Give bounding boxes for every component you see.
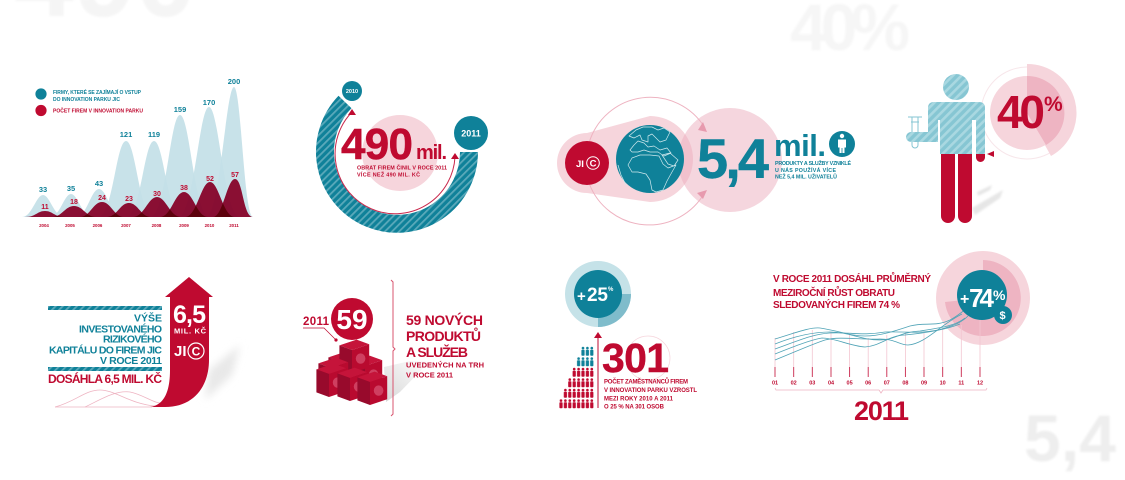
- heading: [406, 311, 483, 360]
- description: PRODUKTY A SLUŽBY VZNIKLÉ: [775, 159, 851, 167]
- heading: [773, 271, 931, 311]
- growth gauge: [565, 261, 631, 327]
- year labels: 2006: [93, 223, 103, 228]
- description: O 25 % NA 301 OSOB: [604, 404, 665, 410]
- interested firms values: [39, 77, 240, 194]
- month labels: 12: [977, 380, 983, 386]
- year labels: 2010: [205, 223, 215, 228]
- badge 2010: 2010: [346, 89, 358, 95]
- year label with pointer: 2011: [303, 316, 330, 328]
- heading: 59 NOVÝCH: [406, 311, 483, 328]
- arrow value: MIL. KČ: [174, 326, 207, 336]
- JIC logo: [174, 343, 204, 360]
- company count values: 23: [125, 196, 133, 203]
- badge 2010: [342, 81, 362, 101]
- interested firms values: 121: [120, 130, 132, 139]
- trend lines: [775, 300, 978, 360]
- month labels: 06: [865, 380, 871, 386]
- heading: INVESTOVANÉHO: [79, 322, 162, 335]
- year labels: [39, 223, 239, 228]
- badge 2011: [454, 116, 488, 150]
- description: V INNOVATION PARKU VZROSTL: [604, 388, 697, 394]
- value 490 mil.: 490: [341, 120, 413, 169]
- month gridlines: [775, 320, 980, 367]
- large pink circle: [678, 108, 782, 212]
- month labels: 10: [940, 380, 946, 386]
- heading: MEZIROČNÍ RŮST OBRATU: [773, 285, 895, 299]
- pink capsule: [557, 116, 693, 202]
- pink disc: [362, 115, 438, 191]
- interested firms values: 43: [95, 179, 103, 188]
- panel: 5,4 million users: [557, 97, 855, 225]
- description: U NÁS POUŽÍVÁ VÍCE: [775, 166, 836, 174]
- description: MEZI ROKY 2010 A 2011: [604, 396, 674, 402]
- company count values: [41, 172, 239, 211]
- description: OBRAT FIREM ČINIL V ROCE 2011: [357, 164, 447, 172]
- growth gauge: 25: [587, 285, 608, 306]
- description: [357, 164, 447, 178]
- month labels: 08: [902, 380, 908, 386]
- company count values: 24: [98, 195, 106, 202]
- company count values: 38: [180, 185, 188, 192]
- ghost number 5,4: 5,4: [1024, 401, 1116, 475]
- month labels: 07: [884, 380, 890, 386]
- month labels: 11: [958, 380, 964, 386]
- year labels: 2005: [65, 223, 75, 228]
- floor shadow: [972, 185, 1003, 215]
- description: VÍCE NEŽ 490 MIL. KČ: [357, 170, 420, 178]
- company count values: 30: [153, 191, 161, 198]
- legend: FIRMY, KTERÉ SE ZAJÍMAJÍ O VSTUP: [53, 88, 142, 96]
- year labels: 2011: [229, 223, 239, 228]
- panel: turnover 490 mil: [325, 81, 488, 224]
- growth badge: %: [993, 287, 1006, 303]
- value 40%: 40: [997, 86, 1045, 138]
- year bracket: [775, 388, 987, 393]
- year labels: 2007: [121, 223, 131, 228]
- panel: company count chart: [22, 77, 253, 228]
- month labels: 05: [847, 380, 853, 386]
- value 301: 301: [602, 335, 669, 381]
- people pyramid: [559, 346, 594, 410]
- growth badge: $: [999, 310, 1006, 322]
- heading: KAPITÁLU DO FIREM JIC: [49, 343, 162, 356]
- company count peaks: [25, 179, 253, 217]
- person lower red: [941, 154, 985, 223]
- hatched rule top: [48, 306, 162, 310]
- growth gauge: %: [608, 287, 614, 293]
- growth badge: 74: [969, 283, 995, 313]
- JIC logo circle: [565, 141, 609, 185]
- company count values: 18: [70, 199, 78, 206]
- globe: [616, 125, 684, 193]
- panel: venture capital arrow: [48, 277, 240, 407]
- heading: RIZIKOVÉHO: [103, 333, 162, 346]
- orbit arrows: [589, 97, 707, 225]
- value 490 mil.: [341, 120, 447, 169]
- value 5,4 mil.: mil.: [774, 128, 826, 163]
- legend: [35, 88, 143, 116]
- badge 59: [331, 298, 373, 340]
- interested firms values: 170: [203, 98, 215, 107]
- heading: [49, 312, 162, 367]
- heading: V ROCE 2011 DOSÁHL PRŮMĚRNÝ: [773, 271, 931, 285]
- arrow value: 6,5: [173, 301, 206, 329]
- hatched rule bottom: [48, 367, 162, 371]
- heading: VÝŠE: [134, 312, 162, 325]
- growth badge: [957, 270, 1012, 324]
- month ticks: [775, 367, 980, 377]
- month labels: [772, 380, 983, 386]
- interested firms peaks: [22, 87, 253, 217]
- year labels: 2004: [39, 223, 49, 228]
- up arrow: [594, 332, 602, 408]
- heading: A SLUŽEB: [406, 343, 468, 360]
- JIC logo: C: [192, 344, 201, 358]
- panel: 74 percent turnover growth: [772, 251, 1030, 426]
- value 5,4 mil.: 5,4: [697, 127, 769, 190]
- growth gauge: +: [577, 288, 586, 305]
- result line: DOSÁHLA 6,5 MIL. KČ: [48, 371, 162, 386]
- panel: 301 employees: [559, 261, 697, 410]
- value 40%: %: [1044, 93, 1063, 116]
- subtext: V ROCE 2011: [406, 370, 453, 380]
- growth badge: +: [960, 291, 969, 308]
- faint circle: [626, 336, 670, 380]
- heading: SLEDOVANÝCH FIREM 74 %: [773, 298, 900, 311]
- stacked boxes: [316, 340, 387, 405]
- month labels: 09: [921, 380, 927, 386]
- month labels: 02: [791, 380, 797, 386]
- interested firms values: 200: [228, 77, 240, 86]
- legend: DO INNOVATION PARKU JIC: [53, 97, 120, 103]
- value 5,4 mil.: [697, 127, 826, 190]
- radial chart: [936, 251, 1030, 345]
- month labels: 01: [772, 380, 778, 386]
- panel: 59 new products: [303, 280, 484, 416]
- year labels: 2009: [179, 223, 189, 228]
- description: POČET ZAMĚSTNANCŮ FIREM: [604, 378, 688, 386]
- year label with pointer: [303, 316, 338, 342]
- pie chart: [981, 64, 1077, 159]
- icon: person in circle: [829, 131, 855, 157]
- legend: POČET FIREM V INNOVATION PARKU: [53, 107, 143, 114]
- month labels: 03: [809, 380, 815, 386]
- JIC logo circle: JI: [576, 159, 584, 170]
- badge 59: 59: [336, 304, 368, 335]
- pointer: [987, 151, 994, 157]
- interested firms values: 35: [67, 184, 75, 193]
- wave lines: [55, 390, 165, 407]
- description: [775, 159, 851, 180]
- year labels: 2008: [152, 223, 162, 228]
- person upper hatched: [906, 74, 985, 154]
- hatched ring: [325, 102, 469, 224]
- badge 2011: 2011: [461, 128, 481, 138]
- value 490 mil.: mil.: [416, 142, 447, 164]
- company count values: 57: [231, 172, 239, 179]
- description: NEŽ 5,4 MIL. UŽIVATELŮ: [775, 172, 837, 180]
- panel: 40 percent person: [906, 64, 1077, 223]
- interested firms values: 33: [39, 185, 47, 194]
- red arrow: [150, 277, 213, 407]
- company count values: 52: [206, 176, 214, 183]
- arrow shadow: [205, 345, 240, 400]
- test tube: [908, 117, 922, 148]
- JIC logo: JI: [174, 343, 187, 360]
- month labels: 04: [828, 380, 835, 386]
- JIC logo circle: C: [590, 158, 597, 170]
- description: [604, 378, 697, 410]
- interested firms values: 119: [148, 130, 160, 139]
- subtext: [406, 360, 484, 380]
- thin arrow arc: [335, 109, 459, 214]
- box shadow: [384, 361, 430, 402]
- heading: PRODUKTŮ: [406, 326, 481, 344]
- bracket: [391, 280, 395, 416]
- company count values: 11: [41, 204, 49, 211]
- subtext: UVEDENÝCH NA TRH: [406, 360, 484, 370]
- interested firms values: 159: [174, 105, 186, 114]
- heading: V ROCE 2011: [100, 355, 162, 367]
- year 2011: 2011: [854, 396, 909, 426]
